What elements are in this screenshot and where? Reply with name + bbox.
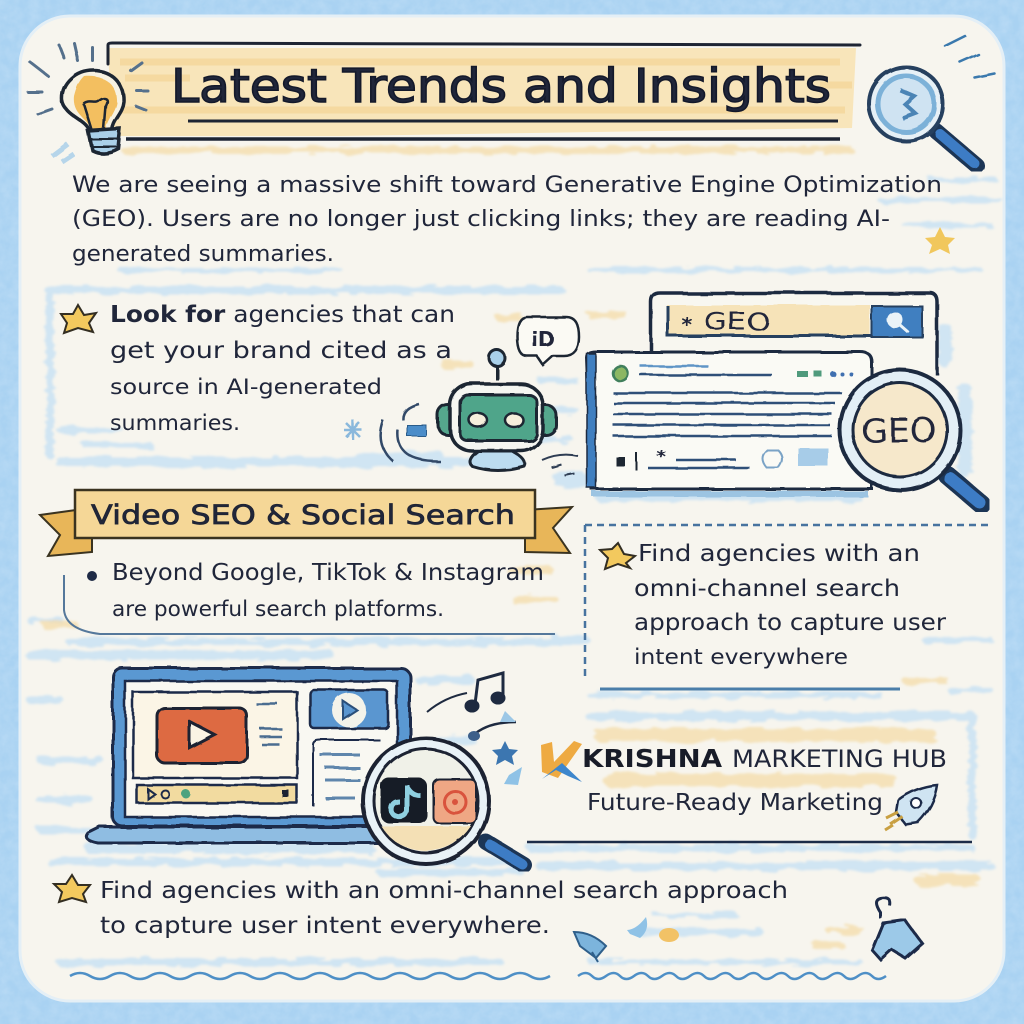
callout text: intent everywhere: [634, 645, 848, 670]
panel: bottom callout: [54, 875, 788, 939]
callout text: omni-channel search: [634, 574, 900, 602]
intro text: (GEO). Users are no longer just clicking links; they are reading AI-: [72, 206, 890, 232]
label: *: [682, 313, 693, 337]
icon: social magnifier: [363, 738, 524, 865]
icon: small heart doodle: [627, 917, 647, 938]
callout text: get your brand cited as a: [110, 336, 452, 364]
callout text: [110, 300, 455, 436]
icon: search bar: GEO: [704, 307, 770, 336]
icon: star: [54, 875, 90, 902]
wavy underline: [70, 973, 886, 979]
icon: orange blot: [659, 928, 679, 942]
icon: robot: iD: [531, 327, 554, 351]
text: video seo description: [64, 558, 555, 634]
icon: diamond sparkle: [504, 767, 522, 785]
callout text: Find agencies with an omni-channel search approach: [100, 876, 788, 904]
panel: look for agencies: [61, 300, 455, 436]
icon: star: [600, 543, 635, 569]
tagline: Future-Ready Marketing: [587, 790, 883, 816]
icon: GEO magnifier: GEO: [861, 411, 937, 450]
watercolor washes: [30, 150, 1000, 962]
icon: GEO magnifier: [840, 370, 982, 505]
icon: shopping tag: [872, 898, 922, 960]
panel: bottom callout: to capture user intent everywhere.: [100, 913, 550, 939]
intro text: generated summaries.: [72, 241, 334, 267]
icon: search bar: [651, 293, 937, 375]
brand logo: [541, 741, 582, 778]
icon: browser results window: *: [656, 446, 666, 467]
icon: rocket: [885, 785, 937, 830]
brand name: MARKETING HUB: [732, 745, 947, 773]
icon: small blue star: [492, 741, 518, 765]
icon: rocket doodle: [574, 932, 606, 962]
callout text: summaries.: [110, 411, 240, 436]
panel: omni-channel callout: [585, 525, 990, 689]
icon: light bulb: [28, 43, 148, 162]
ribbon heading: video seo: [40, 490, 572, 556]
icon: browser results window: [587, 352, 872, 494]
callout text: [634, 539, 946, 670]
icon: laptop with video player: [86, 668, 410, 843]
title: Latest Trends and Insights: [171, 59, 831, 113]
text: video seo description: Beyond Google, TikTok & Instagram: [112, 558, 544, 586]
icon: star: [61, 305, 96, 333]
callout text: source in AI-generated: [110, 375, 382, 400]
text: video seo description: are powerful search platforms.: [112, 597, 444, 622]
tiktok glyph: [392, 785, 421, 817]
callout text: approach to capture user: [634, 608, 946, 636]
icon: music notes: [427, 673, 516, 741]
callout text: Look for agencies that can: [110, 300, 455, 328]
intro text: [72, 172, 942, 267]
icon: small star: [925, 227, 955, 254]
ribbon heading: video seo: Video SEO & Social Search: [91, 500, 515, 531]
panel: brand: [527, 741, 972, 842]
title banner: [108, 43, 860, 139]
intro text: We are seeing a massive shift toward Generative Engine Optimization: [72, 172, 942, 198]
callout text: Find agencies with an: [638, 539, 920, 567]
brand name: KRISHNA: [582, 744, 723, 773]
icon: magnifier top right: [869, 36, 995, 165]
icon: robot: [344, 317, 579, 476]
